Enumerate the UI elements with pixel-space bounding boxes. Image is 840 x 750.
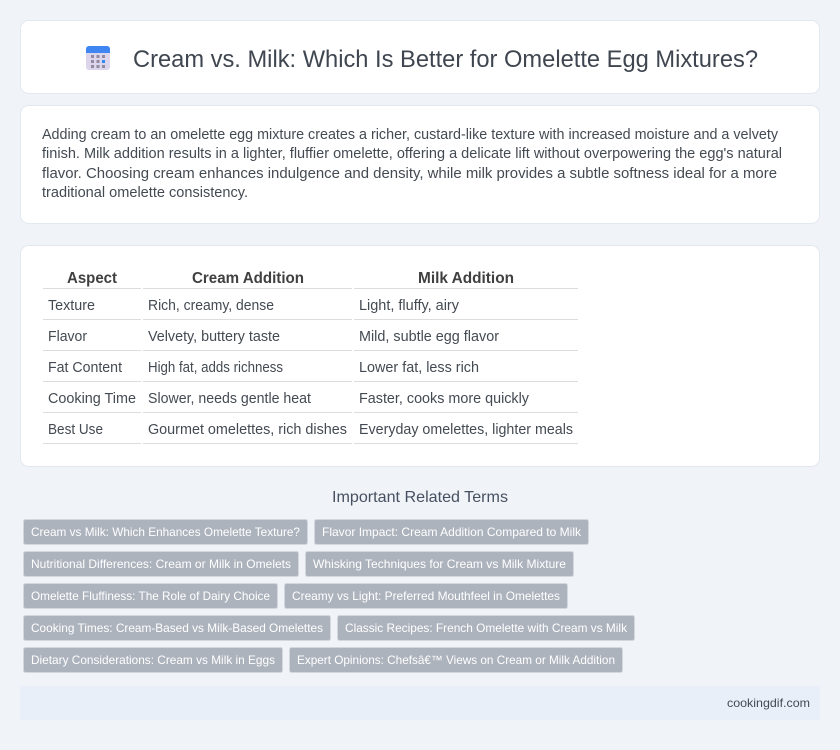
tag — [290, 648, 622, 672]
tag — [24, 552, 298, 576]
table header: Cream Addition — [192, 270, 304, 287]
tag — [24, 520, 308, 544]
header card — [20, 20, 820, 94]
panel: intro paragraph — [20, 106, 820, 224]
heading: important related terms: Important Related Terms — [332, 489, 508, 506]
panel: intro paragraph: flavor. Choosing cream enhances indulgence and density, while milk provides a subtle softness ideal for a more — [42, 166, 777, 182]
row: cooking time — [48, 391, 530, 407]
tag: Cooking Times: Cream-Based vs Milk-Based Omelettes — [31, 621, 323, 635]
table header: Aspect — [67, 270, 118, 287]
panel: comparison table — [20, 246, 820, 466]
tag — [314, 520, 588, 544]
icon: calendar — [86, 46, 110, 70]
row: cooking time: Faster, cooks more quickly — [359, 391, 530, 407]
panel: intro paragraph: finish. Milk addition results in a lighter, fluffier omelette, offering a delicate lift without overpowering the egg's natural — [42, 146, 782, 162]
tag: Classic Recipes: French Omelette with Cream vs Milk — [345, 621, 628, 635]
row: flavor: Mild, subtle egg flavor — [359, 329, 499, 345]
tag: Flavor Impact: Cream Addition Compared to Milk — [322, 525, 582, 539]
tag — [24, 616, 330, 640]
row: texture: Rich, creamy, dense — [148, 298, 274, 314]
tag: Expert Opinions: Chefsâ€™ Views on Cream or Milk Addition — [297, 653, 615, 667]
row: best use: Gourmet omelettes, rich dishes — [148, 422, 347, 438]
row: flavor — [48, 329, 499, 345]
row: fat content: High fat, adds richness — [148, 360, 283, 376]
row: best use — [48, 422, 573, 438]
tag — [306, 552, 574, 576]
tag — [284, 584, 568, 608]
tag — [338, 616, 634, 640]
table header — [67, 270, 514, 287]
related term tags — [24, 520, 634, 672]
row: fat content: Fat Content — [48, 360, 122, 376]
row: cooking time: Cooking Time — [48, 391, 136, 407]
row: texture: Light, fluffy, airy — [359, 298, 460, 314]
row: texture — [48, 298, 460, 314]
row: fat content: Lower fat, less rich — [359, 360, 479, 376]
tag: Dietary Considerations: Cream vs Milk in Eggs — [31, 653, 275, 667]
tag: Whisking Techniques for Cream vs Milk Mixture — [313, 557, 566, 571]
tag: Nutritional Differences: Cream or Milk in Omelets — [31, 557, 291, 571]
row: best use: Everyday omelettes, lighter meals — [359, 422, 573, 438]
tag: Creamy vs Light: Preferred Mouthfeel in Omelettes — [292, 589, 560, 603]
panel: intro paragraph: traditional omelette consistency. — [42, 185, 248, 201]
row: cooking time: Slower, needs gentle heat — [148, 391, 311, 407]
tag: Omelette Fluffiness: The Role of Dairy Choice — [31, 589, 270, 603]
footer: cookingdif.com — [727, 696, 810, 710]
tag — [24, 584, 278, 608]
title: Cream vs. Milk: Which Is Better for Omelette Egg Mixtures? — [133, 46, 758, 73]
row: flavor: Flavor — [48, 329, 87, 345]
tag: Cream vs Milk: Which Enhances Omelette Texture? — [31, 525, 300, 539]
row: texture: Texture — [48, 298, 95, 314]
footer — [20, 686, 820, 720]
row: flavor: Velvety, buttery taste — [148, 329, 280, 345]
panel: intro paragraph: Adding cream to an omelette egg mixture creates a richer, custard-like texture with increased moisture and a velvety — [42, 127, 779, 143]
row: fat content — [48, 360, 479, 376]
tag — [24, 648, 282, 672]
table header: Milk Addition — [418, 270, 514, 287]
row: best use: Best Use — [48, 422, 103, 438]
